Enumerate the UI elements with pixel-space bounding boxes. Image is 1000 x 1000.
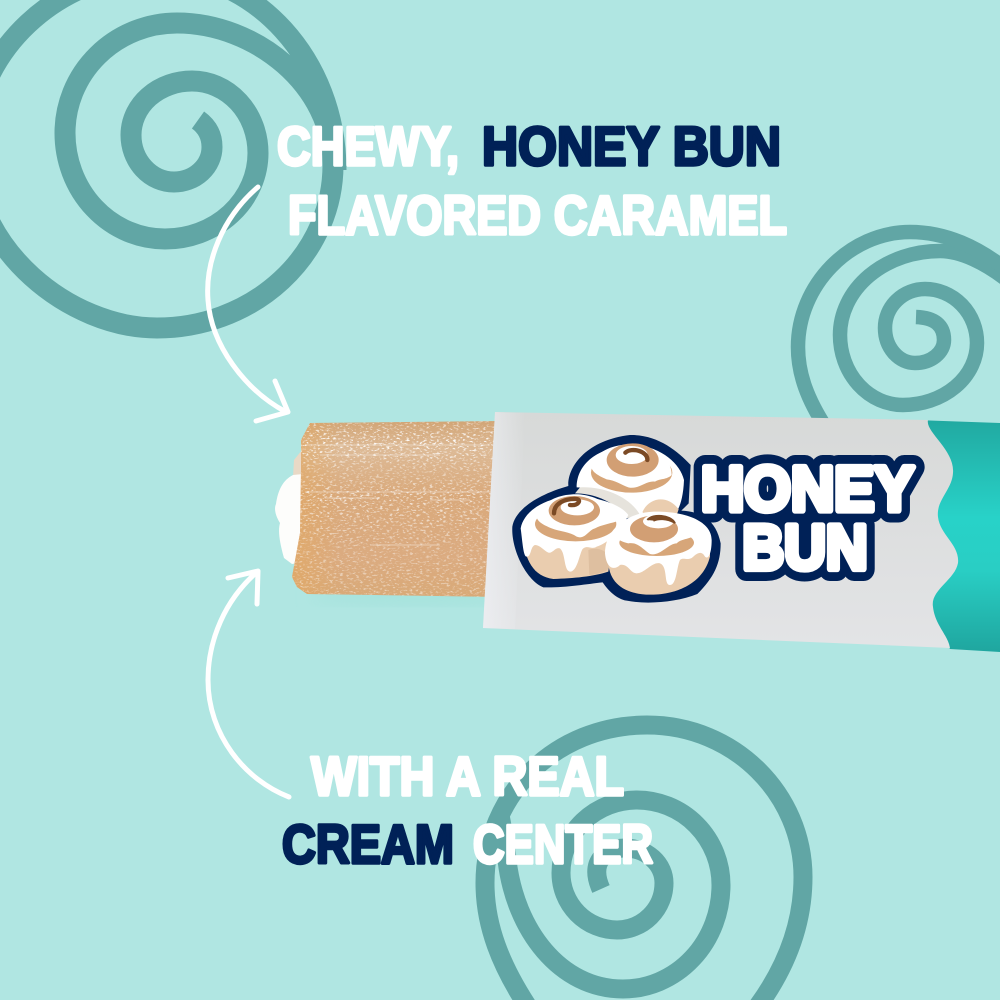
- wrapper end: teal: [915, 420, 1000, 652]
- candy shadow: [310, 588, 530, 604]
- headline: chewy honey bun flavored caramel: [277, 115, 787, 246]
- spiral: bottom: [485, 725, 803, 1000]
- logo wordmark: HONEY: [701, 454, 914, 524]
- headline: chewy honey bun flavored caramel: FLAVORED CARAMEL: [288, 184, 787, 246]
- logo wordmark outline: HONEY: [701, 454, 914, 524]
- headline: with a real cream center: CENTER: [473, 813, 653, 875]
- arrow: bottom pointing to cream: [208, 571, 289, 797]
- logo wordmark outline: [701, 454, 914, 583]
- right bun: [605, 512, 712, 595]
- arrow: top pointing to caramel: [208, 187, 288, 421]
- headline: with a real cream center: WITH A REAL: [311, 745, 624, 807]
- wrapper: grey paper: [483, 412, 958, 648]
- logo outline: [512, 435, 721, 603]
- logo wordmark: BUN: [742, 513, 868, 583]
- logo: honey bun: [512, 435, 914, 603]
- spiral: top left: [0, 0, 336, 328]
- candy: caramel with cream center: [275, 421, 494, 597]
- caramel body: [292, 421, 494, 597]
- left bun: [521, 494, 628, 579]
- logo wordmark outline: BUN: [742, 513, 868, 583]
- top bun: [575, 443, 684, 518]
- logo wordmark: [701, 454, 914, 583]
- spiral: top right: [798, 232, 1000, 428]
- cream center: [275, 474, 303, 564]
- headline: chewy honey bun flavored caramel: CHEWY,: [277, 115, 459, 177]
- headline: with a real cream center: [282, 745, 653, 875]
- headline: with a real cream center: CREAM: [282, 813, 454, 875]
- headline: chewy honey bun flavored caramel: HONEY BUN: [482, 115, 781, 177]
- caramel end nub: [293, 450, 303, 477]
